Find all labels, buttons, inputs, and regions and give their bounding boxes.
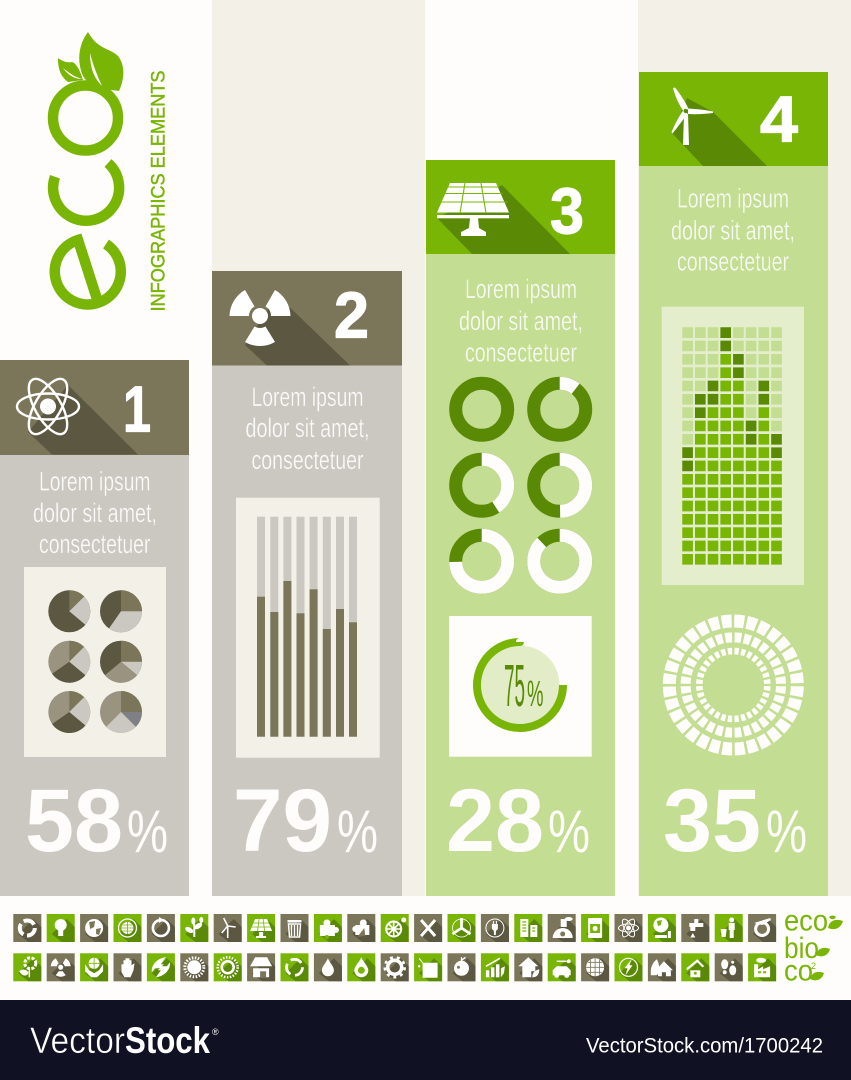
icon: tools [414, 914, 442, 942]
bar chart card [236, 498, 380, 758]
icon: atom [614, 914, 642, 942]
pie 1 [48, 590, 90, 632]
panel 1 body [0, 455, 189, 896]
icon: house leaf [514, 953, 542, 981]
icon: solar panel [247, 914, 275, 942]
co2 badge: 2 [811, 961, 816, 971]
vectorstock logo: Stock [125, 1020, 210, 1061]
vectorstock logo [30, 1020, 219, 1061]
pie 6 [100, 691, 142, 733]
logo letter e [55, 240, 121, 305]
28 percent [446, 770, 590, 870]
pie 3 [48, 641, 90, 683]
28 percent: % [548, 798, 590, 865]
donut 1 [456, 383, 508, 435]
icon: person and bin [715, 914, 743, 942]
icon: solar house [247, 953, 275, 981]
panel 1 text [33, 467, 157, 559]
35 percent: 35 [663, 770, 761, 870]
panel 3 text: Lorem ipsum [465, 274, 577, 304]
logo large leaf [79, 32, 123, 91]
icon: rising bars [481, 953, 509, 981]
pixel columns: green cells [688, 354, 776, 565]
panel 4 text: dolor sit amet, [671, 215, 795, 245]
icon: factory [748, 953, 776, 981]
icon: axe and stump [681, 953, 709, 981]
panel 3 long shadow [437, 185, 570, 254]
panel 3 text: consectetuer [465, 338, 577, 368]
panel 1 [0, 360, 189, 896]
gauge label [504, 653, 544, 719]
35 percent [663, 770, 807, 870]
bio badge: bio [784, 932, 819, 965]
icon: ring arrows [280, 953, 308, 981]
donut charts [456, 383, 586, 587]
panel 2 body [212, 366, 402, 896]
panel 3 body [426, 254, 615, 896]
panel 3 header [426, 160, 615, 254]
icon: lightning circle [614, 953, 642, 981]
eco bio co2 badges [784, 904, 843, 988]
pie chart card [24, 567, 166, 757]
panel 4 header [639, 72, 828, 166]
eco badge: eco [784, 904, 828, 938]
panel 4 text: Lorem ipsum [677, 184, 789, 214]
logo letter c [53, 163, 119, 221]
79 percent: % [337, 798, 378, 865]
pixel chart card [662, 307, 804, 585]
vectorstock url: VectorStock.com/1700242 [586, 1035, 823, 1058]
donut 5 [456, 535, 508, 587]
icon: earth [80, 914, 108, 942]
icon: recycle [13, 914, 41, 942]
bar tracks [257, 517, 357, 737]
donut 3 [456, 459, 508, 511]
panel 4 [639, 72, 828, 896]
vectorstock logo: Vector [30, 1020, 125, 1061]
icon: power plant dome [548, 914, 576, 942]
subtitle: infographics elements: INFOGRAPHICS ELEMENTS [148, 70, 170, 312]
35 percent: % [766, 798, 807, 865]
icon: globe ring [114, 914, 142, 942]
icon: wind turbine [672, 88, 713, 145]
icon: solar panel [437, 183, 509, 236]
28 percent: 28 [446, 770, 544, 870]
number 2: 2 [334, 278, 369, 352]
icon: radiation [230, 290, 290, 346]
logo letter o [53, 86, 118, 150]
pixel columns: dark cells [688, 327, 776, 474]
panel 4 body [639, 166, 828, 896]
icon: hand [114, 953, 142, 981]
icon: puzzle leaf [347, 914, 375, 942]
panel 2 long shadow [245, 295, 350, 366]
gauge arc [477, 642, 563, 728]
icon: flower [13, 953, 41, 981]
pie 5 [48, 691, 90, 733]
79 percent [233, 770, 378, 870]
icon: atom [17, 373, 79, 440]
panel 3 text: dolor sit amet, [459, 306, 583, 336]
logo small leaf [58, 58, 83, 82]
icon: footprints [715, 953, 743, 981]
beige column behind panel 4 [638, 0, 851, 896]
number 4: 4 [760, 82, 798, 156]
icon: gear [381, 953, 409, 981]
icon: refresh ring [147, 914, 175, 942]
icon: turbine [214, 914, 242, 942]
footer bar [0, 1000, 851, 1080]
panel 4 text: consectetuer [677, 247, 789, 277]
icon: leaf house [648, 953, 676, 981]
icon: canister [414, 953, 442, 981]
gauge inner disc [480, 646, 560, 724]
panel 1 text: Lorem ipsum [39, 467, 150, 497]
donut 2 [534, 383, 586, 435]
icon: plug [481, 914, 509, 942]
panel 4 long shadow [672, 98, 767, 166]
eco logo [53, 32, 123, 305]
panel 2 header [212, 271, 402, 366]
icon: turbine circle [448, 914, 476, 942]
icon: buildings [514, 914, 542, 942]
58 percent: 58 [25, 770, 123, 870]
co2 badge: co [784, 954, 813, 988]
icon: trash can [280, 914, 308, 942]
panel 1 header [0, 360, 189, 455]
icon: sunburst [180, 953, 208, 981]
75 percent gauge card [449, 616, 592, 757]
panel 1 text: consectetuer [39, 529, 151, 559]
segmented ring chart [669, 621, 797, 749]
panel 2 text: dolor sit amet, [246, 413, 370, 443]
icon strip [13, 914, 776, 981]
panel 4 text [671, 184, 795, 277]
icon: barrel [581, 914, 609, 942]
icon: electric car [548, 953, 576, 981]
panel 1 text: dolor sit amet, [33, 498, 157, 528]
panel 2 text [246, 382, 370, 475]
pie 2 [100, 590, 142, 632]
panel 2 text: Lorem ipsum [252, 382, 364, 412]
vectorstock logo: ® [212, 1027, 219, 1037]
icon: faucet [681, 914, 709, 942]
icon: radiation [47, 953, 75, 981]
panel 1 long shadow [28, 385, 138, 454]
pie 4 [100, 641, 142, 683]
icon: earth in hand [648, 914, 676, 942]
icon: wheel [381, 914, 409, 942]
panel 3 [426, 160, 615, 896]
donut 4 [534, 459, 586, 511]
beige column behind panel 2 [212, 0, 425, 896]
58 percent [25, 770, 168, 870]
icon: two arrows [147, 953, 175, 981]
icon: puzzle [314, 914, 342, 942]
panel 2 [212, 271, 402, 896]
icon: sun ring [214, 953, 242, 981]
icon: drop ring [347, 953, 375, 981]
number 1: 1 [123, 372, 151, 446]
icon: plant [180, 914, 208, 942]
panel 3 text [459, 274, 583, 368]
icon: globe in hands [80, 953, 108, 981]
gauge label: % [527, 673, 544, 714]
number 3: 3 [550, 174, 584, 248]
pixel columns: light cells [688, 327, 776, 447]
gauge label: 75 [504, 653, 525, 719]
panel 2 text: consectetuer [252, 445, 364, 475]
58 percent: % [127, 798, 168, 865]
icon: light bulb [47, 914, 75, 942]
icon: grid globe [581, 953, 609, 981]
icon: apple [448, 953, 476, 981]
icon: drop [314, 953, 342, 981]
icon: plane and earth [748, 914, 776, 942]
bar values [257, 581, 357, 737]
donut 6 [534, 535, 586, 587]
79 percent: 79 [233, 770, 332, 870]
